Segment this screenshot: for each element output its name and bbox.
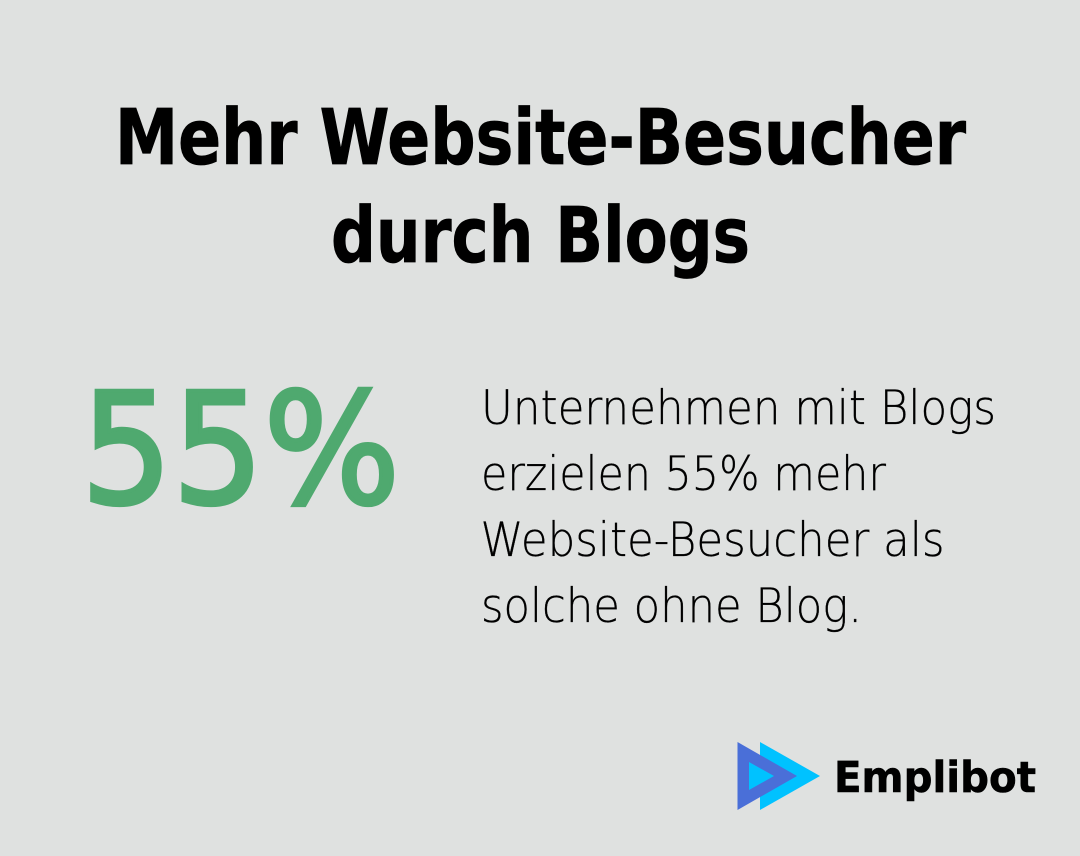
icon: play triangles	[738, 742, 820, 810]
description text: solche ohne Blog.	[481, 579, 862, 634]
logo wordmark: Emplibot	[834, 753, 1036, 803]
description text: Website-Besucher als	[480, 513, 944, 568]
logo: Emplibot	[738, 742, 1036, 810]
title: durch Blogs	[331, 192, 750, 281]
description text: Unternehmen mit Blogs	[481, 381, 996, 436]
description text	[480, 381, 996, 634]
big stat: 55%: 55%	[81, 361, 400, 540]
title	[115, 94, 966, 281]
description text: erzielen 55% mehr	[481, 447, 887, 502]
